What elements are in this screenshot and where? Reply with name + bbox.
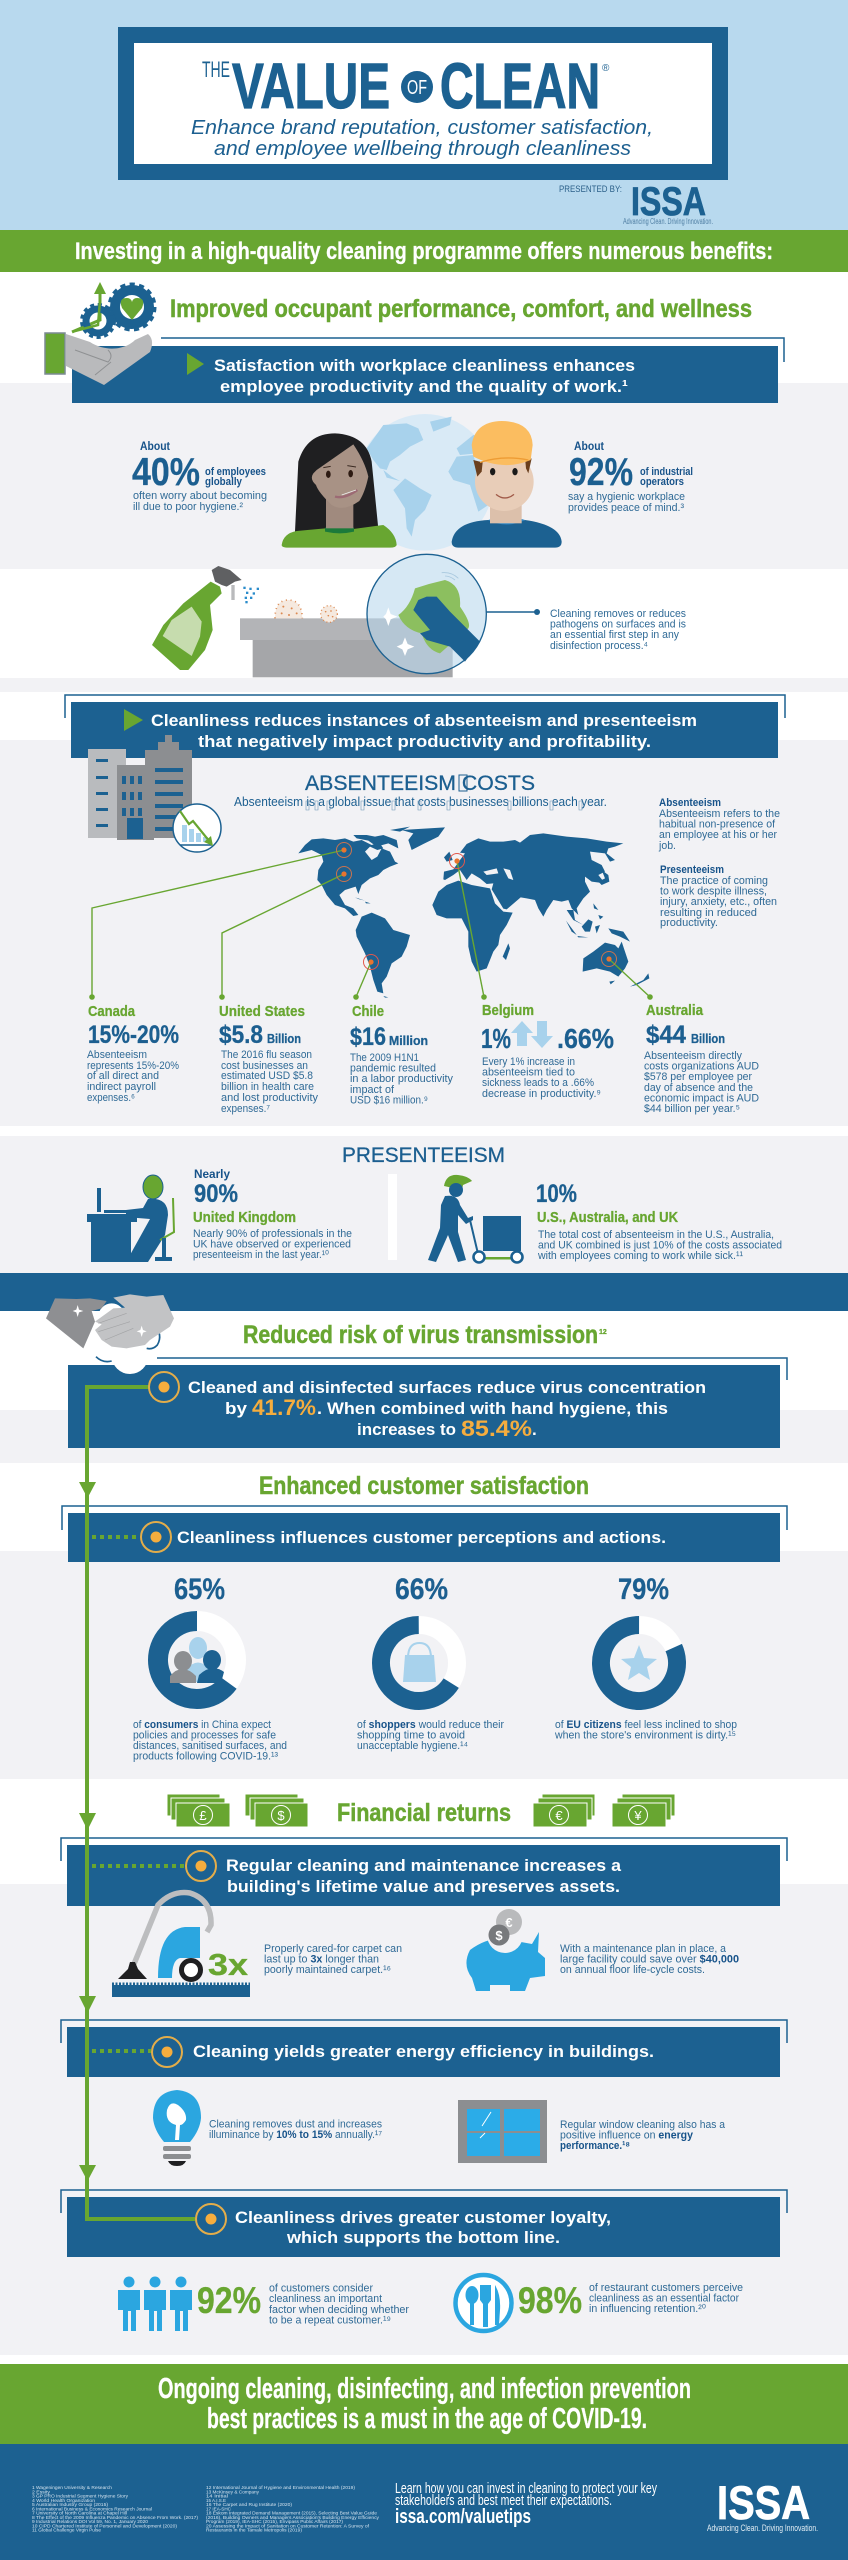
- banner: lifetime value: Regular cleaning and maintenance increases a: [226, 1856, 622, 1875]
- stat: Australia: day of absence and the: [644, 1082, 753, 1094]
- banner: energy efficiency: Cleaning yields greater energy efficiency in buildings.: [193, 2042, 654, 2061]
- icon: dollar notes: $: [277, 1808, 285, 1823]
- stat: 40 percent: ill due to poor hygiene.²: [133, 501, 243, 513]
- green closing banner: best practices is a must in the age of COVID-19.: [207, 2403, 647, 2435]
- text: carpet: last up to 3x longer than: [264, 1954, 379, 1966]
- stat: Australia: costs organizations AUD: [644, 1060, 759, 1072]
- references column two: Program (2019), IEA-SHC (2015), Envipass Public Affairs (2017): [206, 2519, 343, 2525]
- presenter logo: ISSA: [631, 180, 706, 224]
- stat: Australia: $44 billion per year.⁵: [644, 1103, 740, 1115]
- text: illuminance: Cleaning removes dust and increases: [209, 2118, 382, 2130]
- icon: vacuum cleaner: [112, 1892, 250, 1997]
- stat: United States: Billion: [267, 1031, 301, 1046]
- stat: United Kingdom 90 percent: Nearly: [194, 1167, 230, 1181]
- references column one: 11 Global Challenge Virgin Pulse: [32, 2528, 101, 2534]
- definitions: an employee at his or her: [659, 829, 777, 841]
- stat: Australia: $44: [646, 1021, 686, 1049]
- banner: virus concentration: 41.7%: [252, 1395, 316, 1420]
- stat: Australia: $578 per employee per: [644, 1071, 752, 1083]
- illustration: globe: [357, 414, 493, 551]
- chart: 66 percent shoppers: of shoppers would reduce their: [357, 1719, 504, 1731]
- illustration: magnified glove wiping: [367, 554, 486, 678]
- stat: United Kingdom 90 percent: presenteeism in the last year.¹⁰: [193, 1249, 330, 1261]
- banner: satisfaction: [72, 338, 784, 403]
- stat: United States: billion in health care: [221, 1081, 314, 1093]
- text: maintenance plan: large facility could save over $40,000: [560, 1954, 739, 1966]
- stat: Australia: [644, 1002, 759, 1115]
- stat: Chile: pandemic resulted: [350, 1062, 436, 1074]
- icon: pound notes: [167, 1794, 230, 1827]
- stat: Chile: in a labor productivity: [350, 1073, 453, 1085]
- stat: 40 percent: often worry about becoming: [133, 490, 267, 502]
- definitions: injury, anxiety, etc., often: [660, 896, 777, 908]
- references column two: 15 A.I.S.E: [206, 2498, 226, 2504]
- title box: VALUE: [232, 50, 390, 122]
- section: absenteeism: [65, 695, 785, 1115]
- stat: United Kingdom 90 percent: United Kingdom: [193, 1209, 296, 1226]
- stat: 10 percent: [536, 1180, 782, 1262]
- icon: yen notes: [612, 1794, 675, 1827]
- banner: virus concentration: . When combined with hand hygiene, this: [317, 1399, 668, 1418]
- callout: cleaning removes pathogens: [486, 608, 686, 652]
- stat: 98 percent restaurant customers: cleanliness as an essential factor: [589, 2292, 739, 2304]
- footer logo: ISSA: [717, 2476, 810, 2529]
- map markers and leaders: [89, 842, 653, 1000]
- stat: 92 percent: of industrial: [640, 466, 693, 478]
- definitions: Presenteeism: [660, 864, 724, 876]
- stat: Belgium: absenteeism tied to: [482, 1066, 575, 1078]
- references column one: 4 World Health Organization: [32, 2498, 95, 2504]
- callout: cleaning removes pathogens: an essential first step in any: [550, 629, 679, 641]
- definitions: resulting in reduced: [660, 907, 757, 919]
- icon: piggy bank with coins: $: [495, 1928, 503, 1943]
- icon: window: [458, 2100, 547, 2163]
- references column two: (2016), Building Owners and Managers Association's Building Energy Efficiency: [206, 2515, 380, 2521]
- chart: 65 percent consumers: products following COVID-19.¹³: [133, 1750, 278, 1762]
- references column two: 20 Assessing the Impact of Sanitation on Customer Retention: A Survey of: [206, 2523, 370, 2529]
- stat: 98 percent restaurant customers: 98%: [518, 2280, 582, 2321]
- heading: reduced risk: Reduced risk of virus transmission: [243, 1321, 598, 1349]
- text: carpet: [264, 1943, 402, 1976]
- illustration: man with hard hat: [452, 421, 562, 548]
- stat: Chile: Million: [389, 1033, 428, 1048]
- stat: 92 percent: 92%: [569, 451, 633, 494]
- section: occupant performance: [45, 282, 784, 678]
- call to action: [395, 2480, 657, 2528]
- references column two: 12 International Journal of Hygiene and Environmental Health (2019): [206, 2485, 355, 2491]
- section: presenteeism: [87, 1144, 782, 1262]
- icon: sick worker with cart: [428, 1175, 522, 1262]
- heading: enhanced customer satisfaction: Enhanced customer satisfaction: [259, 1472, 589, 1500]
- stat: 92 percent customers: factor when deciding whether: [269, 2304, 409, 2316]
- definitions: Absenteeism refers to the: [659, 808, 780, 820]
- text: illuminance: illuminance by 10% to 15% annually.¹⁷: [209, 2129, 382, 2141]
- stat: 92 percent: provides peace of mind.³: [568, 502, 684, 514]
- references column two: 16 The Carpet and Rug Institute (2020): [206, 2502, 292, 2508]
- stat: 40 percent: About: [140, 439, 170, 453]
- definitions: to work despite illness,: [660, 886, 767, 898]
- text: window cleaning: [560, 2119, 726, 2152]
- subheading: Absenteeism is a global issue that costs businesses billions each year.: [234, 794, 607, 809]
- chart: 65 percent consumers: of consumers in China expect: [133, 1719, 271, 1731]
- banner: virus concentration: increases to: [357, 1420, 456, 1439]
- icon: plate with cutlery: [456, 2275, 512, 2331]
- stat: Canada: expenses.⁶: [87, 1092, 135, 1104]
- stat: 92 percent customers: to be a repeat customer.¹⁹: [269, 2314, 391, 2326]
- stat: United Kingdom 90 percent: [193, 1167, 352, 1261]
- stat: 92 percent: say a hygienic workplace: [568, 491, 685, 503]
- icon: piggy bank with coins: [466, 1909, 545, 1991]
- donut: 66 percent: [367, 1611, 471, 1715]
- title box: CLEAN: [440, 50, 600, 122]
- call to action: stakeholders and best meet their expectations.: [395, 2492, 612, 2509]
- references column one: 1 Wageningen University & Research: [32, 2485, 112, 2491]
- banner: satisfaction: Satisfaction with workplace cleanliness enhances: [214, 356, 635, 375]
- green closing banner: [0, 2364, 848, 2444]
- references column one: [32, 2485, 198, 2534]
- references column two: 17 IEA-SHC: [206, 2506, 231, 2512]
- references column one: 3 GP PRO Industrial Segment Hygiene Story: [32, 2494, 129, 2500]
- banner: satisfaction: employee productivity and the quality of work.¹: [220, 377, 628, 396]
- banner: virus concentration: Cleaned and disinfected surfaces reduce virus concentration: [188, 1378, 706, 1397]
- title box: ®: [602, 63, 610, 74]
- stat: Belgium: 1%: [481, 1023, 511, 1054]
- stat: 92 percent: operators: [640, 476, 684, 488]
- definitions: job.: [658, 840, 676, 852]
- references column one: 5 Australian Industry Group (2015): [32, 2502, 108, 2508]
- presenter logo: PRESENTED BY:: [559, 184, 622, 194]
- stat: Chile: $16: [350, 1023, 386, 1051]
- stat: Chile: Chile: [352, 1003, 384, 1020]
- callout: cleaning removes pathogens: pathogens on surfaces and is: [550, 618, 686, 630]
- references column two: Restaurants in the Tamale Metropolis (2019): [206, 2528, 302, 2534]
- stat: Australia: Australia: [646, 1002, 704, 1019]
- stat: United States: estimated USD $5.8: [221, 1070, 313, 1082]
- stat: 92 percent customers: of customers consider: [269, 2282, 373, 2294]
- title box: THE: [202, 57, 230, 82]
- references column two: [206, 2485, 380, 2534]
- references column one: 7 University of North Carolina at Chapel Hill: [32, 2511, 127, 2517]
- chart: 66 percent shoppers: [357, 1573, 504, 1752]
- chart: 79 percent EU citizens: when the store's environment is dirty.¹⁵: [554, 1730, 736, 1742]
- stat: Belgium: sickness leads to a .66%: [482, 1077, 594, 1089]
- stat: 10 percent: and UK combined is just 10% of the costs associated: [538, 1240, 782, 1252]
- stat: Australia: Absenteeism directly: [644, 1050, 742, 1062]
- text: maintenance plan: [560, 1943, 739, 1976]
- references column two: 18 Eskom Integrated Demand Management (2015), Selecting Best Value Guide: [206, 2511, 377, 2517]
- references column one: 6 International Business & Economics Research Journal: [32, 2506, 152, 2512]
- banner: absenteeism and presenteeism: [65, 695, 785, 758]
- green banner: [0, 230, 848, 272]
- stat: United States: $5.8: [219, 1021, 263, 1049]
- stat: 10 percent: with employees coming to work while sick.¹¹: [537, 1250, 743, 1262]
- icon: euro notes: €: [555, 1808, 563, 1823]
- stat: Canada: Canada: [88, 1003, 136, 1020]
- text: carpet: poorly maintained carpet.¹⁶: [264, 1964, 391, 1976]
- references column one: 9 Industrial Relations DOI Vol 59, No. 1, January 2020: [32, 2519, 148, 2525]
- stat: Australia: economic impact is AUD: [644, 1092, 759, 1104]
- stat: United States: cost businesses an: [221, 1060, 308, 1072]
- title box: and employee wellbeing through cleanliness: [214, 138, 631, 160]
- icon: piggy bank with coins: €: [505, 1915, 513, 1930]
- text: maintenance plan: With a maintenance plan in place, a: [560, 1943, 727, 1955]
- chart: 66 percent shoppers: shopping time to avoid: [357, 1730, 465, 1742]
- icon: dollar notes: [245, 1794, 308, 1827]
- stat: Canada: Absenteeism: [87, 1049, 147, 1061]
- callout: cleaning removes pathogens: disinfection process.⁴: [550, 640, 648, 652]
- icon: buildings with declining chart: [88, 735, 221, 852]
- connector: green flow line with arrows and nodes: [79, 1372, 226, 2234]
- icon: vacuum cleaner: 3x: [208, 1947, 249, 1982]
- stat: United States: and lost productivity: [221, 1092, 318, 1104]
- text: carpet: Properly cared-for carpet can: [264, 1943, 402, 1955]
- chart: 65 percent consumers: policies and processes for safe: [133, 1730, 276, 1742]
- stat: Canada: indirect payroll: [87, 1081, 156, 1093]
- stat: 92 percent customers: cleanliness an important: [269, 2293, 382, 2305]
- stat: 92 percent: [568, 439, 693, 514]
- banner: energy efficiency: [61, 2020, 787, 2077]
- definitions: productivity.: [660, 917, 718, 929]
- stat: United Kingdom 90 percent: Nearly 90% of professionals in the: [193, 1228, 352, 1240]
- definitions: Absenteeism: [659, 797, 721, 809]
- stat: 40 percent: [132, 439, 267, 513]
- definitions: [658, 797, 780, 929]
- heading: reduced risk: 12: [599, 1329, 607, 1336]
- references column two: 14 Initial: [206, 2494, 228, 2500]
- chart: 65 percent consumers: [133, 1573, 287, 1762]
- stat: United Kingdom 90 percent: 90%: [194, 1180, 238, 1208]
- stat: Belgium: Belgium: [482, 1002, 534, 1019]
- definitions: habitual non-presence of: [659, 818, 776, 830]
- stat: 92 percent: About: [574, 439, 604, 453]
- stat: 98 percent restaurant customers: [518, 2280, 743, 2321]
- stat: Canada: [87, 1003, 179, 1104]
- icon: hands washing: [46, 1294, 174, 1374]
- banner: virus concentration: 85.4%: [461, 1416, 532, 1441]
- stat: Chile: USD $16 million.⁹: [350, 1094, 428, 1106]
- banner: absenteeism and presenteeism: that negatively impact productivity and profitability.: [198, 732, 651, 751]
- stat: 10 percent: 10%: [536, 1180, 577, 1208]
- icon: three people: [118, 2276, 192, 2331]
- donut: 79 percent: [589, 1613, 689, 1713]
- stat: Canada: 15%-20%: [88, 1021, 179, 1049]
- stat: Chile: The 2009 H1N1: [350, 1052, 419, 1064]
- stat: Chile: [350, 1003, 453, 1106]
- references column one: 10 CIPD Chartered Institute of Personnel and Development (2020): [32, 2523, 177, 2529]
- references column two: 13 McKinsey & Company: [206, 2489, 260, 2495]
- banner: customer loyalty: which supports the bottom line.: [286, 2228, 560, 2247]
- stat: United States: United States: [219, 1003, 305, 1020]
- chart: 65 percent consumers: 65%: [174, 1573, 225, 1606]
- stat: 98 percent restaurant customers: of restaurant customers perceive: [589, 2282, 743, 2294]
- chart: 66 percent shoppers: 66%: [395, 1573, 448, 1606]
- stat: Belgium: [481, 1002, 614, 1100]
- chart: 79 percent EU citizens: [554, 1573, 737, 1742]
- stat: 92 percent customers: 92%: [197, 2280, 261, 2321]
- heading: absenteeism costs: ABSENTEEISM COSTS: [305, 772, 535, 795]
- section: virus transmission: [46, 1294, 787, 1448]
- world map: [298, 827, 649, 998]
- chart: 79 percent EU citizens: 79%: [618, 1573, 669, 1606]
- stat: United States: [219, 1003, 318, 1115]
- stat: 40 percent: globally: [205, 476, 243, 488]
- stat: Belgium: .66%: [557, 1023, 614, 1054]
- stat: 10 percent: The total cost of absenteeism in the U.S., Australia,: [538, 1229, 774, 1241]
- icon: person at desk: [87, 1175, 174, 1262]
- icon: yen notes: ¥: [633, 1808, 642, 1823]
- banner: absenteeism and presenteeism: Cleanliness reduces instances of absenteeism and presenteeism: [151, 711, 697, 730]
- banner: customer perceptions: Cleanliness influences customer perceptions and actions.: [177, 1528, 666, 1547]
- presenter logo: Advancing Clean. Driving Innovation.: [623, 217, 713, 226]
- stat: 10 percent: U.S., Australia, and UK: [537, 1209, 678, 1226]
- banner: customer perceptions: [62, 1506, 787, 1562]
- text: illuminance: [209, 2118, 382, 2141]
- banner: virus concentration: [68, 1358, 787, 1448]
- stat: Canada: represents 15%-20%: [87, 1060, 179, 1072]
- stat: Australia: Billion: [691, 1031, 725, 1046]
- banner: customer loyalty: Cleanliness drives greater customer loyalty,: [235, 2208, 611, 2227]
- illustration: woman: [282, 433, 397, 548]
- stat: 92 percent customers: [197, 2280, 409, 2326]
- illustration: germs on counter: [240, 600, 453, 677]
- chart: 79 percent EU citizens: of EU citizens feel less inclined to shop: [555, 1719, 737, 1731]
- illustration: spray bottle: [152, 566, 259, 670]
- icon: euro notes: [533, 1794, 595, 1827]
- stat: 40 percent: of employees: [205, 466, 266, 478]
- donut: 65 percent: [143, 1606, 251, 1714]
- stat: United States: The 2016 flu season: [221, 1049, 312, 1061]
- title box: [118, 27, 728, 180]
- references column one: 8 The Effect of the 2009 Influenza Pandemic on Absence From Work. (2017): [32, 2515, 198, 2521]
- icon: gears on hand: [45, 282, 154, 385]
- stat: United Kingdom 90 percent: UK have observed or experienced: [193, 1238, 351, 1250]
- banner: customer loyalty: [61, 2190, 787, 2257]
- stat: Belgium: Every 1% increase in: [482, 1056, 575, 1068]
- icon: pound notes: £: [199, 1808, 207, 1823]
- banner: lifetime value: building's lifetime value and preserves assets.: [227, 1877, 620, 1896]
- definitions: The practice of coming: [660, 875, 768, 887]
- call to action: Learn how you can invest in cleaning to protect your key: [395, 2480, 657, 2497]
- presenter logo: [559, 180, 713, 226]
- title box: Enhance brand reputation, customer satisfaction,: [191, 117, 653, 139]
- banner: lifetime value: [61, 1838, 787, 1906]
- banner: virus concentration: .: [532, 1420, 537, 1439]
- heading: presenteeism: PRESENTEEISM: [342, 1144, 505, 1167]
- call to action: issa.com/valuetips: [395, 2506, 531, 2528]
- callout: cleaning removes pathogens: Cleaning removes or reduces: [550, 608, 686, 620]
- heading: improved occupant performance: Improved occupant performance, comfort, and wellness: [170, 295, 752, 323]
- icon: light bulb with leaf: [153, 2090, 201, 2166]
- banner: virus concentration: by: [225, 1399, 248, 1418]
- references column one: 2 Essity: [32, 2489, 51, 2495]
- text: window cleaning: Regular window cleaning also has a: [560, 2119, 726, 2131]
- chart: 65 percent consumers: distances, sanitised surfaces, and: [133, 1740, 287, 1752]
- heading: financial returns: Financial returns: [337, 1799, 511, 1827]
- stat: Belgium: decrease in productivity.⁹: [482, 1088, 601, 1100]
- section: financial returns: [167, 1794, 675, 1827]
- stat: 98 percent restaurant customers: in influencing retention.²⁰: [589, 2303, 707, 2315]
- stat: 40 percent: 40%: [132, 451, 200, 494]
- title box: OF: [407, 77, 427, 99]
- stat: Chile: impact of: [350, 1084, 395, 1096]
- text: window cleaning: performance.¹⁸: [560, 2140, 630, 2152]
- footer panel: [0, 2444, 848, 2560]
- chart: 66 percent shoppers: unacceptable hygiene.¹⁴: [357, 1740, 468, 1752]
- stat: Canada: of all direct and: [87, 1070, 159, 1082]
- text: maintenance plan: on annual floor life-cycle costs.: [560, 1964, 705, 1976]
- stat: United States: expenses.⁷: [221, 1103, 270, 1115]
- header panel: [0, 0, 848, 230]
- text: window cleaning: positive influence on energy: [560, 2130, 694, 2142]
